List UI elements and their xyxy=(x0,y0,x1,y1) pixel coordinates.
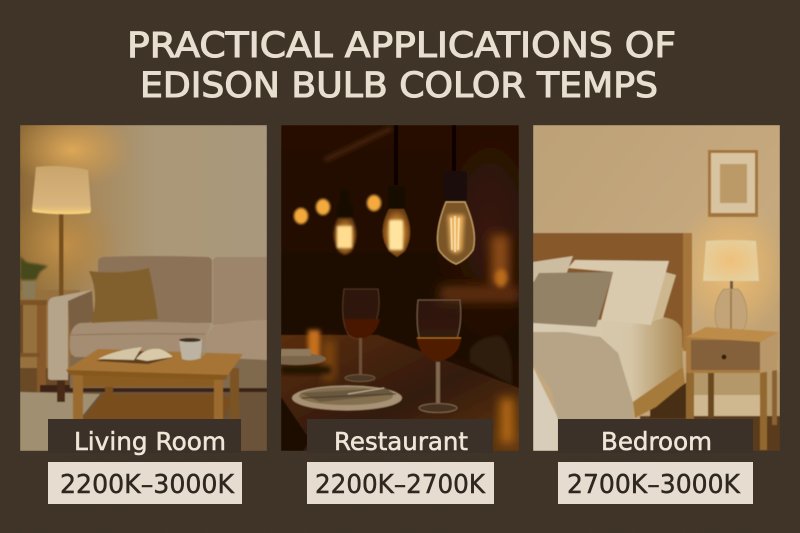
coffee cup xyxy=(179,338,206,360)
title: PRACTICAL APPLICATIONS OF xyxy=(127,26,676,66)
throw pillow xyxy=(89,268,158,323)
label: living room xyxy=(48,419,241,456)
throw blanket xyxy=(533,332,634,420)
wine glass front xyxy=(417,300,461,412)
panel: bedroom xyxy=(533,125,790,451)
framed picture xyxy=(708,150,758,217)
nightstand xyxy=(686,327,779,450)
value: living room range: 2200K–3000K xyxy=(60,470,235,500)
photo: wall with lamp glow xyxy=(20,125,267,368)
value: living room range xyxy=(48,462,242,504)
photo: wall with lamp glow xyxy=(533,125,790,451)
sofa xyxy=(48,256,267,402)
value: restaurant range: 2200K–2700K xyxy=(315,470,486,500)
pillows xyxy=(533,256,676,327)
panel: restaurant xyxy=(281,125,519,451)
photo: dark backdrop with blurred lights xyxy=(281,125,519,388)
title xyxy=(127,26,676,106)
table lamp xyxy=(703,240,759,333)
value: restaurant range xyxy=(307,462,494,504)
floor lamp xyxy=(32,166,91,296)
label: restaurant: Restaurant xyxy=(334,427,468,456)
label: restaurant xyxy=(307,419,493,456)
panel: living room xyxy=(4,112,267,451)
blurred background bulbs xyxy=(294,195,381,224)
coffee table xyxy=(66,349,243,420)
value: bedroom range: 2700K–3000K xyxy=(567,470,741,500)
pendant bulb large xyxy=(438,125,474,264)
plate with napkin xyxy=(292,386,402,410)
label: bedroom xyxy=(558,419,753,456)
side table with plant xyxy=(20,256,70,392)
table surface xyxy=(281,330,519,451)
pendant bulb medium xyxy=(382,125,410,257)
bed xyxy=(533,233,692,451)
pendant bulb small xyxy=(334,190,356,255)
label: living room: Living Room xyxy=(74,427,226,456)
title: EDISON BULB COLOR TEMPS xyxy=(140,66,658,106)
label: bedroom: Bedroom xyxy=(601,427,712,456)
wine glass back xyxy=(343,289,380,382)
value: bedroom range xyxy=(558,462,753,504)
open book xyxy=(96,347,174,364)
floor and carpet xyxy=(20,385,267,451)
left plate xyxy=(281,348,327,366)
